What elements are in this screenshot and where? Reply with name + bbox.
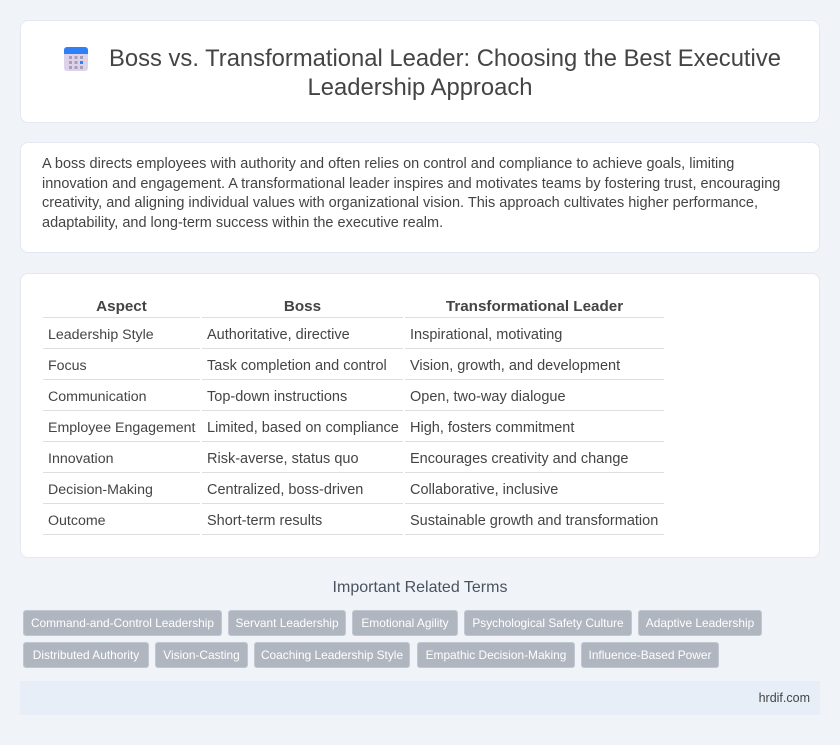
row: Communication: Open, two-way dialogue [410, 389, 566, 405]
row: Decision-Making: Centralized, boss-driven [207, 482, 363, 498]
row: Focus: Task completion and control [207, 358, 387, 374]
row: Outcome: Short-term results [207, 513, 322, 529]
row: Leadership Style: Authoritative, directive [207, 327, 350, 343]
header panel [20, 20, 820, 123]
header: Boss: Boss [284, 298, 321, 315]
row: Communication [48, 389, 566, 405]
comparison table [43, 298, 664, 535]
row: Decision-Making: Collaborative, inclusive [410, 482, 558, 498]
tag [638, 610, 762, 636]
tag: Distributed Authority [33, 648, 139, 662]
row: Innovation: Innovation [48, 451, 113, 467]
tag: Servant Leadership [235, 616, 339, 630]
tag: Adaptive Leadership [646, 616, 754, 630]
tag: Vision-Casting [163, 648, 240, 662]
title [109, 45, 781, 101]
row: Employee Engagement [48, 420, 574, 436]
row: Communication: Communication [48, 389, 147, 405]
row: Leadership Style: Inspirational, motivating [410, 327, 562, 343]
tag: Psychological Safety Culture [472, 616, 624, 630]
tag [581, 642, 719, 668]
row: Focus: Vision, growth, and development [410, 358, 620, 374]
row: Outcome: Outcome [48, 513, 106, 529]
comparison table panel [20, 273, 820, 558]
row: Employee Engagement: Limited, based on compliance [207, 420, 399, 436]
intro paragraph: adaptability, and long-term success within the executive realm. [42, 215, 443, 231]
row: Outcome: Sustainable growth and transformation [410, 513, 658, 529]
intro paragraph: A boss directs employees with authority and often relies on control and compliance to achieve goals, limiting [42, 156, 734, 172]
row: Leadership Style [48, 327, 562, 343]
row: Communication: Top-down instructions [207, 389, 347, 405]
row: Focus: Focus [48, 358, 87, 374]
tag: Command-and-Control Leadership [31, 616, 214, 630]
header: Transformational Leader: Transformational Leader [446, 298, 623, 315]
header: Aspect: Aspect [96, 298, 147, 315]
row: Innovation: Encourages creativity and change [410, 451, 628, 467]
tag: Emotional Agility [361, 616, 449, 630]
row: Decision-Making: Decision-Making [48, 482, 153, 498]
intro paragraph: creativity, and aligning individual values with organizational vision. This approach cultivates higher performance, [42, 195, 758, 211]
row: Innovation [48, 451, 628, 467]
row: Leadership Style: Leadership Style [48, 327, 154, 343]
tag [23, 610, 222, 636]
tag [228, 610, 346, 636]
intro paragraph: innovation and engagement. A transformational leader inspires and motivates teams by fostering trust, encouraging [42, 176, 780, 192]
footer source: hrdif.com [759, 691, 810, 705]
tag [417, 642, 575, 668]
intro paragraph [42, 156, 780, 231]
tag [155, 642, 248, 668]
related terms heading: Important Related Terms [333, 579, 507, 596]
title: Leadership Approach [308, 74, 532, 101]
icon: calendar [64, 47, 88, 71]
intro text panel [20, 142, 820, 253]
tag [254, 642, 410, 668]
tag: Coaching Leadership Style [261, 648, 403, 662]
row: Outcome [48, 513, 658, 529]
row: Employee Engagement: High, fosters commitment [410, 420, 574, 436]
row: Focus [48, 358, 620, 374]
related terms tags [23, 610, 762, 668]
title: Boss vs. Transformational Leader: Choosing the Best Executive [109, 45, 781, 72]
row: Employee Engagement: Employee Engagement [48, 420, 196, 436]
footer bar [20, 681, 820, 715]
tag [23, 642, 149, 668]
tag: Influence-Based Power [589, 648, 711, 662]
row: Innovation: Risk-averse, status quo [207, 451, 359, 467]
row: Decision-Making [48, 482, 558, 498]
tag: Empathic Decision-Making [426, 648, 566, 662]
tag [464, 610, 632, 636]
tag [352, 610, 458, 636]
